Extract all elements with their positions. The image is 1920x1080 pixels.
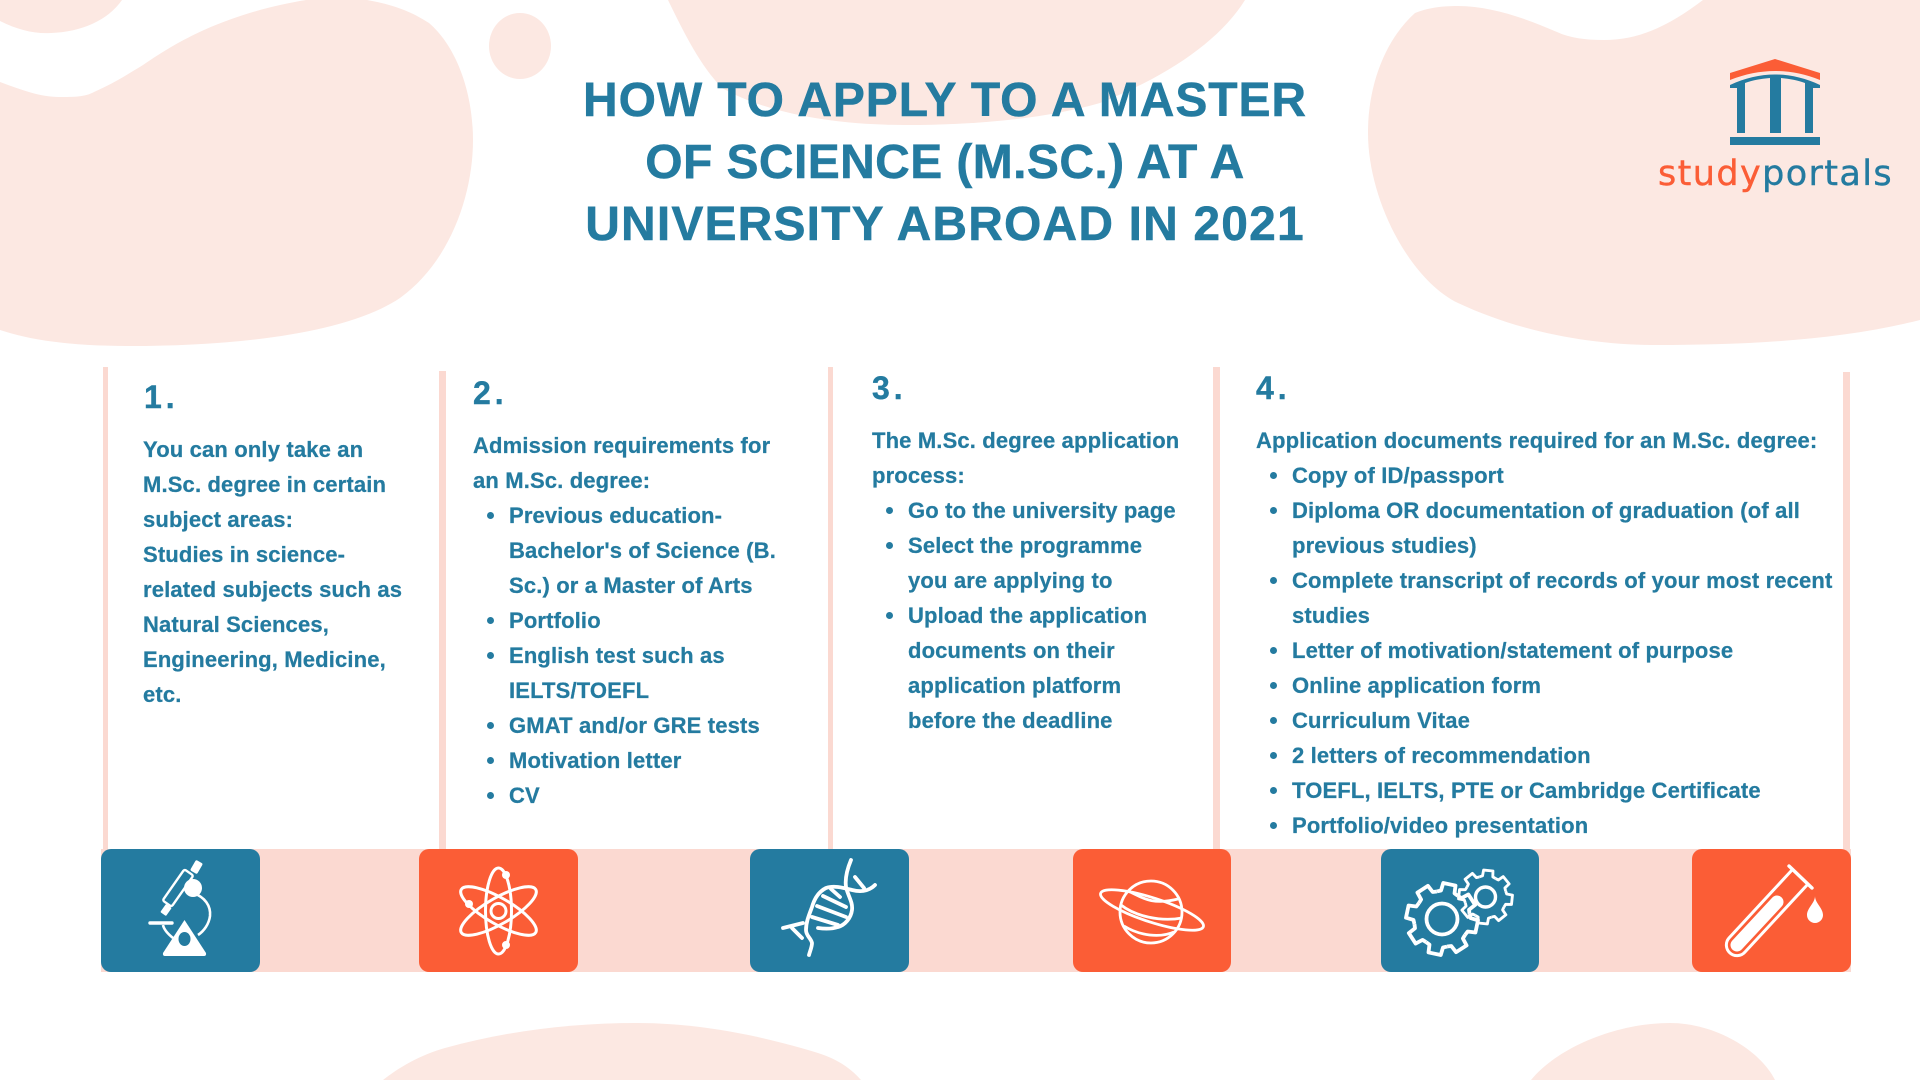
logo wordmark: studyportals bbox=[1658, 154, 1893, 194]
logo: studyportals bbox=[1658, 59, 1893, 194]
step 3 text: Upload the application bbox=[908, 603, 1147, 628]
step 4 text: studies bbox=[1292, 603, 1370, 628]
step 2 text: IELTS/TOEFL bbox=[509, 678, 649, 703]
step 2 text: Motivation letter bbox=[509, 748, 681, 773]
step number 1: 1. bbox=[144, 379, 179, 415]
panel: step 3 bbox=[872, 370, 1179, 733]
title bbox=[583, 74, 1307, 251]
step 1 text: Studies in science- bbox=[143, 542, 345, 567]
panel: step 2 bbox=[473, 375, 776, 808]
step 2 text: English test such as bbox=[509, 643, 725, 668]
step 4 text: 2 letters of recommendation bbox=[1292, 743, 1591, 768]
icon: dna bbox=[750, 849, 909, 972]
step 4 text: Diploma OR documentation of graduation (of all bbox=[1292, 498, 1800, 523]
title: UNIVERSITY ABROAD IN 2021 bbox=[585, 198, 1305, 251]
step 4 text: Portfolio/video presentation bbox=[1292, 813, 1588, 838]
step 1 text: etc. bbox=[143, 682, 182, 707]
icon: planet bbox=[1073, 849, 1231, 972]
panel: step 4 bbox=[1256, 370, 1832, 838]
band bbox=[101, 849, 1851, 972]
step 3 text: Select the programme bbox=[908, 533, 1142, 558]
icon: atom bbox=[419, 849, 578, 972]
step 1 text: M.Sc. degree in certain bbox=[143, 472, 386, 497]
step 3 text: Go to the university page bbox=[908, 498, 1176, 523]
step 1 text: Engineering, Medicine, bbox=[143, 647, 386, 672]
step 4 text: Letter of motivation/statement of purpose bbox=[1292, 638, 1733, 663]
icon: building bbox=[1730, 59, 1820, 145]
step 1 text: Natural Sciences, bbox=[143, 612, 329, 637]
step 3 text bbox=[872, 428, 1179, 733]
step 3 text: application platform bbox=[908, 673, 1121, 698]
step number 4: 4. bbox=[1256, 370, 1291, 406]
step 4 text: Application documents required for an M.Sc. degree: bbox=[1256, 428, 1817, 453]
step 3 text: documents on their bbox=[908, 638, 1115, 663]
step 1 text: related subjects such as bbox=[143, 577, 402, 602]
step 3 text: before the deadline bbox=[908, 708, 1113, 733]
step 1 text bbox=[143, 437, 402, 707]
step 2 text: Portfolio bbox=[509, 608, 601, 633]
step 1 text: You can only take an bbox=[143, 437, 363, 462]
step 4 text: Copy of ID/passport bbox=[1292, 463, 1504, 488]
step 2 text: CV bbox=[509, 783, 540, 808]
title: OF SCIENCE (M.SC.) AT A bbox=[645, 136, 1245, 189]
step 4 text: previous studies) bbox=[1292, 533, 1477, 558]
step 4 text bbox=[1256, 428, 1832, 838]
icon: test tube bbox=[1692, 849, 1851, 972]
step 1 text: subject areas: bbox=[143, 507, 293, 532]
step 4 text: TOEFL, IELTS, PTE or Cambridge Certificate bbox=[1292, 778, 1761, 803]
step 2 text: Sc.) or a Master of Arts bbox=[509, 573, 753, 598]
step number 2: 2. bbox=[473, 375, 508, 411]
step 2 text: Previous education- bbox=[509, 503, 722, 528]
panel: step 1 bbox=[143, 379, 402, 707]
step 3 text: The M.Sc. degree application bbox=[872, 428, 1179, 453]
icon: microscope bbox=[101, 849, 260, 972]
step 4 text: Curriculum Vitae bbox=[1292, 708, 1470, 733]
title: HOW TO APPLY TO A MASTER bbox=[583, 74, 1307, 127]
step number 3: 3. bbox=[872, 370, 907, 406]
step 2 text: Admission requirements for bbox=[473, 433, 770, 458]
step 2 text: an M.Sc. degree: bbox=[473, 468, 650, 493]
step 4 text: Complete transcript of records of your most recent bbox=[1292, 568, 1832, 593]
step 2 text bbox=[473, 433, 776, 808]
step 4 text: Online application form bbox=[1292, 673, 1541, 698]
step 2 text: Bachelor's of Science (B. bbox=[509, 538, 776, 563]
icon: gears bbox=[1381, 849, 1539, 972]
step 2 text: GMAT and/or GRE tests bbox=[509, 713, 760, 738]
step 3 text: process: bbox=[872, 463, 965, 488]
step 3 text: you are applying to bbox=[908, 568, 1113, 593]
